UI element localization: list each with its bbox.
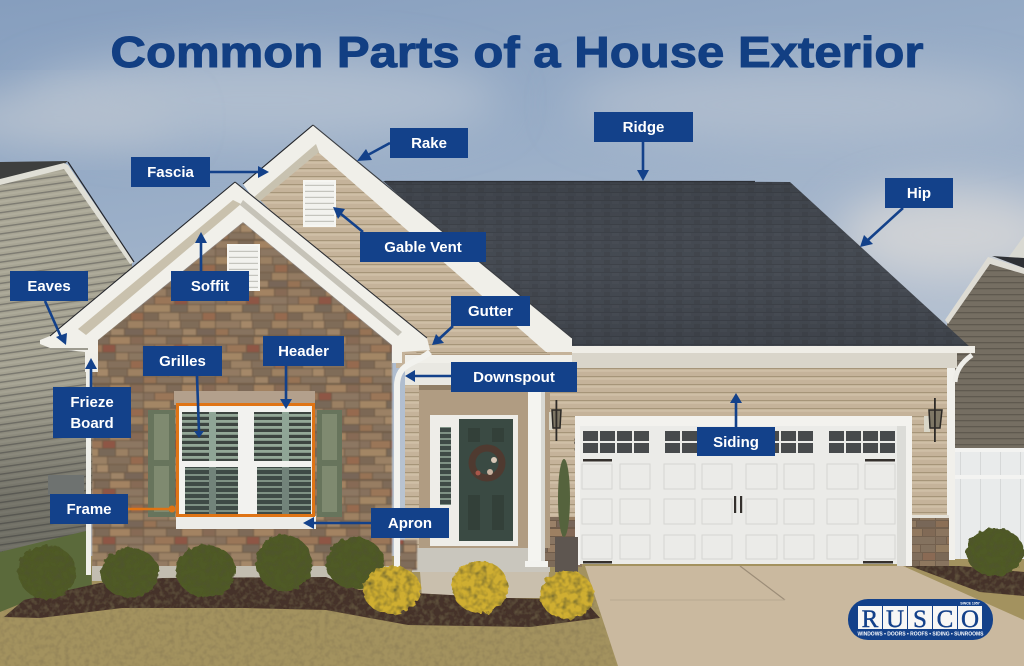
arrow: Gutter [432, 326, 453, 345]
stone base piers [545, 515, 949, 567]
arrow: Fascia [210, 166, 269, 178]
label: Gutter [451, 296, 530, 326]
house number [574, 423, 580, 459]
label: Rake [390, 128, 468, 158]
label: Fascia: Fascia [147, 164, 195, 181]
arrow: Siding [730, 393, 742, 427]
label: Frame [50, 494, 128, 524]
arrow: Header [280, 366, 292, 409]
ground base [0, 530, 1024, 666]
shrubs [18, 528, 1024, 619]
label: Soffit [171, 271, 249, 301]
logo: RUSCO: WINDOWS • DOORS • ROOFS • SIDING • SUNROOMS [858, 632, 984, 638]
frame outline [178, 404, 314, 516]
house number: 7 [574, 445, 580, 459]
front gable trim and soffit [40, 182, 430, 363]
logo: RUSCO [848, 599, 993, 640]
arrow: Hip [860, 208, 903, 247]
label: Eaves [10, 271, 88, 301]
title: Common Parts of a House Exterior [110, 28, 924, 77]
label: Fascia [131, 157, 210, 187]
arrow: Soffit [195, 232, 207, 271]
label: Grilles: Grilles [159, 353, 206, 370]
label: Frieze Board: Board [70, 415, 114, 432]
logo: RUSCO: O [961, 606, 979, 633]
label: Frame: Frame [66, 501, 112, 518]
label: Downspout [451, 362, 577, 392]
downspout [397, 352, 430, 568]
rear gable [243, 125, 572, 356]
label: Rake: Rake [411, 135, 447, 152]
window header bricks [174, 391, 315, 405]
wall lanterns [549, 398, 942, 442]
garage eave trim [572, 346, 975, 560]
logo: RUSCO: C [937, 606, 953, 633]
garage wall siding [545, 362, 948, 518]
label: Hip [885, 178, 953, 208]
label: Gable Vent [360, 232, 486, 262]
shutters [148, 410, 342, 517]
front door [430, 415, 518, 546]
logo: RUSCO: R [862, 606, 879, 633]
label: Header [263, 336, 344, 366]
arrow: Frame [128, 506, 176, 512]
logo: RUSCO: U [886, 606, 904, 633]
logo: RUSCO: SINCE 1957 [960, 602, 980, 606]
porch column [525, 391, 548, 567]
label: Siding: Siding [713, 434, 759, 451]
arrow: Frieze Board [85, 358, 97, 387]
label: Header: Header [278, 343, 329, 360]
label: Frieze Board [53, 387, 131, 438]
label: Gable Vent: Gable Vent [384, 239, 462, 256]
label: Hip: Hip [907, 185, 931, 202]
right neighbor house [945, 236, 1024, 450]
porch [405, 354, 572, 548]
label: Siding [697, 427, 775, 456]
label: Eaves: Eaves [27, 278, 71, 295]
label: Downspout: Downspout [473, 369, 555, 386]
garage door [575, 416, 912, 566]
gable vents [228, 181, 335, 290]
label: Frieze Board: Frieze [70, 394, 114, 411]
driveway [585, 566, 1024, 666]
arrow: Downspout [405, 370, 451, 382]
label: Apron [371, 508, 449, 538]
label: Soffit: Soffit [191, 278, 229, 295]
label: Grilles [143, 346, 222, 376]
label: Apron: Apron [388, 515, 432, 532]
logo: RUSCO: S [913, 606, 927, 633]
white fence [950, 448, 1024, 559]
arrow: Eaves [45, 301, 67, 345]
stone gable wall [92, 222, 417, 570]
arrow: Ridge [637, 142, 649, 181]
house number: 8 [574, 434, 580, 448]
front walk and porch slab [412, 548, 550, 598]
label: Ridge [594, 112, 693, 142]
arrow: Rake [357, 143, 390, 161]
corner board [85, 340, 98, 575]
left neighbor house [0, 161, 134, 552]
potted plant [555, 459, 578, 572]
house number: 1 [574, 423, 580, 437]
label: Gutter: Gutter [468, 303, 513, 320]
wall filler behind eaves [396, 338, 572, 368]
arrow: Gable Vent [333, 207, 363, 232]
main hip roof [383, 181, 970, 347]
label: Ridge: Ridge [623, 119, 664, 136]
arrow: Apron [303, 517, 371, 529]
mulch beds [4, 566, 1024, 627]
arrow: Grilles [194, 376, 204, 438]
window [176, 406, 316, 529]
foundation strip [92, 566, 396, 581]
